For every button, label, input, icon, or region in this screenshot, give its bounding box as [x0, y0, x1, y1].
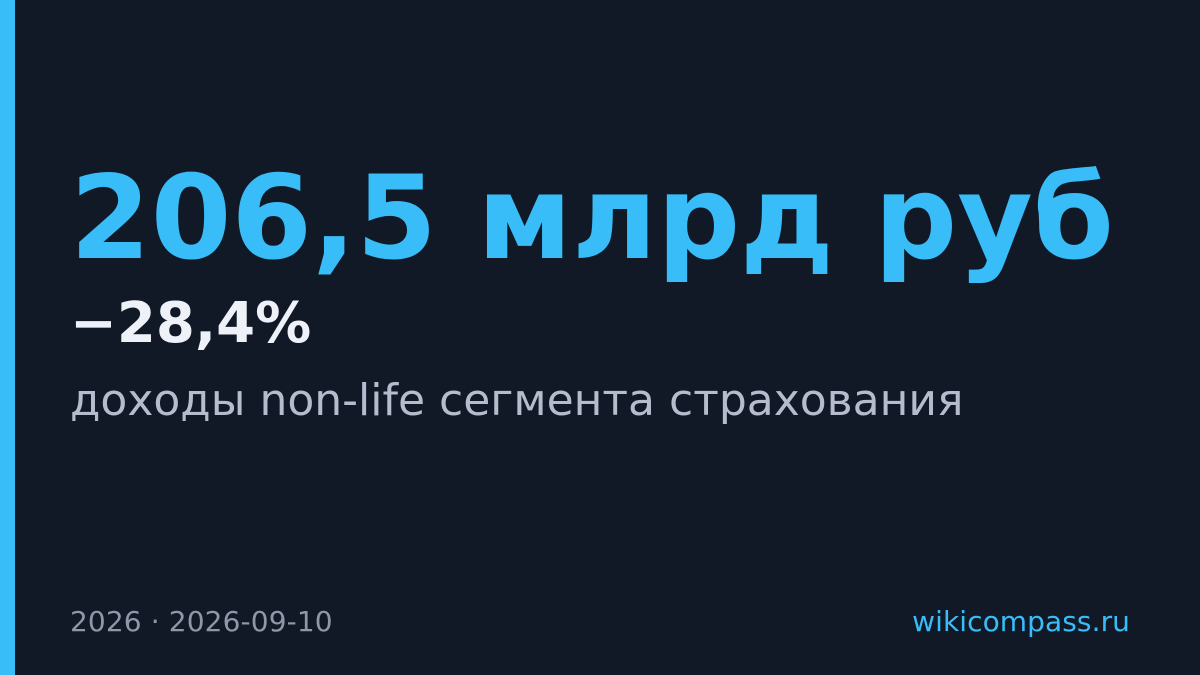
description: доходы non-life сегмента страхования [70, 375, 963, 426]
source site: wikicompass.ru [912, 605, 1130, 638]
accent bar [0, 0, 15, 675]
change percentage: −28,4% [70, 291, 311, 356]
headline value: 206,5 млрд руб [70, 151, 1114, 286]
date line: 2026 · 2026-09-10 [70, 605, 333, 638]
